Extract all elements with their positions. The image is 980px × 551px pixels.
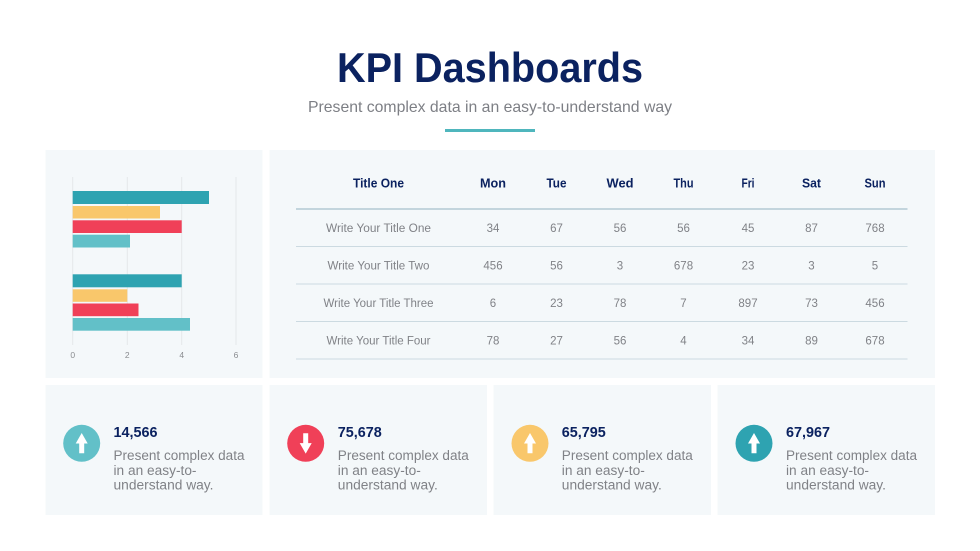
row three [324,298,885,310]
description: Present complex data [338,448,469,463]
description: Present complex data [562,448,693,463]
panel: KPI card 4 [718,385,935,515]
panel: table [270,150,935,378]
row two: 456 [483,260,503,272]
axis labels: 2 [125,350,130,360]
row four: 27 [550,336,563,348]
row three: 6 [490,298,496,310]
row one: Write Your Title One [326,223,431,235]
row one: 768 [865,223,885,235]
row one [326,223,885,235]
value: 67,967 [786,425,830,441]
row four: 678 [865,336,885,348]
row three: 7 [680,298,687,310]
row three: 456 [865,298,885,310]
row two: 5 [872,260,878,272]
icon: down arrow red [287,425,324,462]
description [114,448,245,492]
bars: second group [73,274,190,331]
row four: 56 [614,336,626,348]
table header: Fri [742,176,754,190]
description [338,448,469,492]
row four: Write Your Title Four [326,336,431,348]
row one: 56 [677,223,690,235]
row two: 56 [550,260,563,272]
axis labels: 4 [179,350,184,360]
description: Present complex data [786,448,917,463]
description [786,448,917,492]
row three: 23 [550,298,563,310]
axis labels [70,350,239,360]
row two: 23 [742,260,754,272]
icon: up arrow yellow [512,425,548,462]
row two [328,260,878,272]
value: 65,795 [562,425,606,441]
row three: 73 [805,298,818,310]
description: in an easy-to- [114,463,196,478]
description: understand way. [114,478,214,492]
table header: Mon [480,176,506,190]
value: 75,678 [338,425,382,441]
title underline [445,129,535,132]
row four: 4 [680,336,687,348]
row three: Write Your Title Three [324,298,434,310]
row four [326,336,885,348]
description: Present complex data [114,448,245,463]
description: understand way. [786,478,886,492]
panel: KPI card 1 [46,385,262,515]
value: 14,566 [114,425,158,441]
row one: 56 [614,223,626,235]
row four: 34 [742,336,755,348]
icon: up arrow dark teal [736,425,772,462]
table header: Title One [353,176,404,190]
panel: KPI card 3 [494,385,711,515]
table header: Tue [546,176,567,190]
row three: 78 [614,298,626,310]
row four: 78 [487,336,499,348]
row one: 87 [805,223,818,235]
description: understand way. [562,478,662,492]
description: understand way. [338,478,438,492]
row one: 67 [550,223,563,235]
table header: Wed [606,176,634,190]
axis labels: 0 [70,350,75,360]
table header: Sun [864,176,886,190]
subtitle: Present complex data in an easy-to-understand way [308,99,672,116]
row two: 3 [617,260,623,272]
row one: 45 [742,223,754,235]
bars: first group [73,191,209,248]
row one: 34 [487,223,500,235]
description: in an easy-to- [338,463,421,478]
row two: Write Your Title Two [328,260,430,272]
row two: 3 [808,260,815,272]
table header: Sat [802,176,822,190]
table header: Thu [674,176,694,190]
description [562,448,693,492]
panel: KPI card 2 [270,385,487,515]
axis labels: 6 [234,350,239,360]
title: KPI Dashboards [337,44,643,91]
icon: up arrow teal [63,425,100,462]
description: in an easy-to- [562,463,645,478]
row three: 897 [738,298,758,310]
panel: bar chart [46,150,262,378]
table header [353,176,886,190]
row two: 678 [674,260,693,272]
description: in an easy-to- [786,463,869,478]
row four: 89 [805,336,818,348]
